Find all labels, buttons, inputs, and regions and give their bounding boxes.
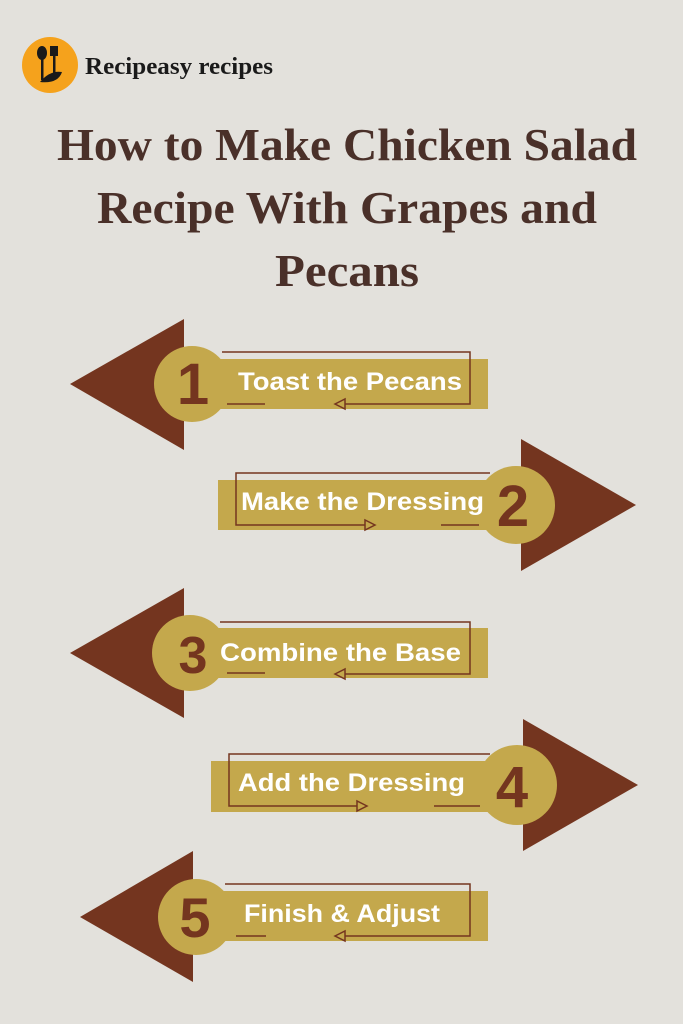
step 2: Make the Dressing: [241, 488, 484, 516]
icon: logo circle: [22, 37, 78, 93]
step 1: [70, 319, 488, 450]
title: Recipe With Grapes and: [97, 182, 597, 233]
step 2: 2: [497, 474, 529, 539]
logo text: Recipeasy recipes: [85, 54, 273, 80]
title: Pecans: [275, 245, 419, 296]
title: How to Make Chicken Salad: [57, 119, 637, 170]
step 5: 5: [179, 886, 211, 949]
step 1: 1: [177, 352, 209, 417]
step 4: [211, 719, 638, 851]
step 3: [70, 588, 488, 718]
step 4: 4: [496, 755, 528, 820]
step 5: [80, 851, 488, 982]
step 5: Finish & Adjust: [244, 900, 441, 928]
step 3: Combine the Base: [220, 639, 461, 667]
step 2: [218, 439, 636, 571]
step 3: 3: [179, 627, 207, 685]
step 1: Toast the Pecans: [238, 368, 462, 396]
title: [57, 119, 637, 296]
step 4: Add the Dressing: [238, 769, 465, 797]
logo: [22, 37, 273, 93]
